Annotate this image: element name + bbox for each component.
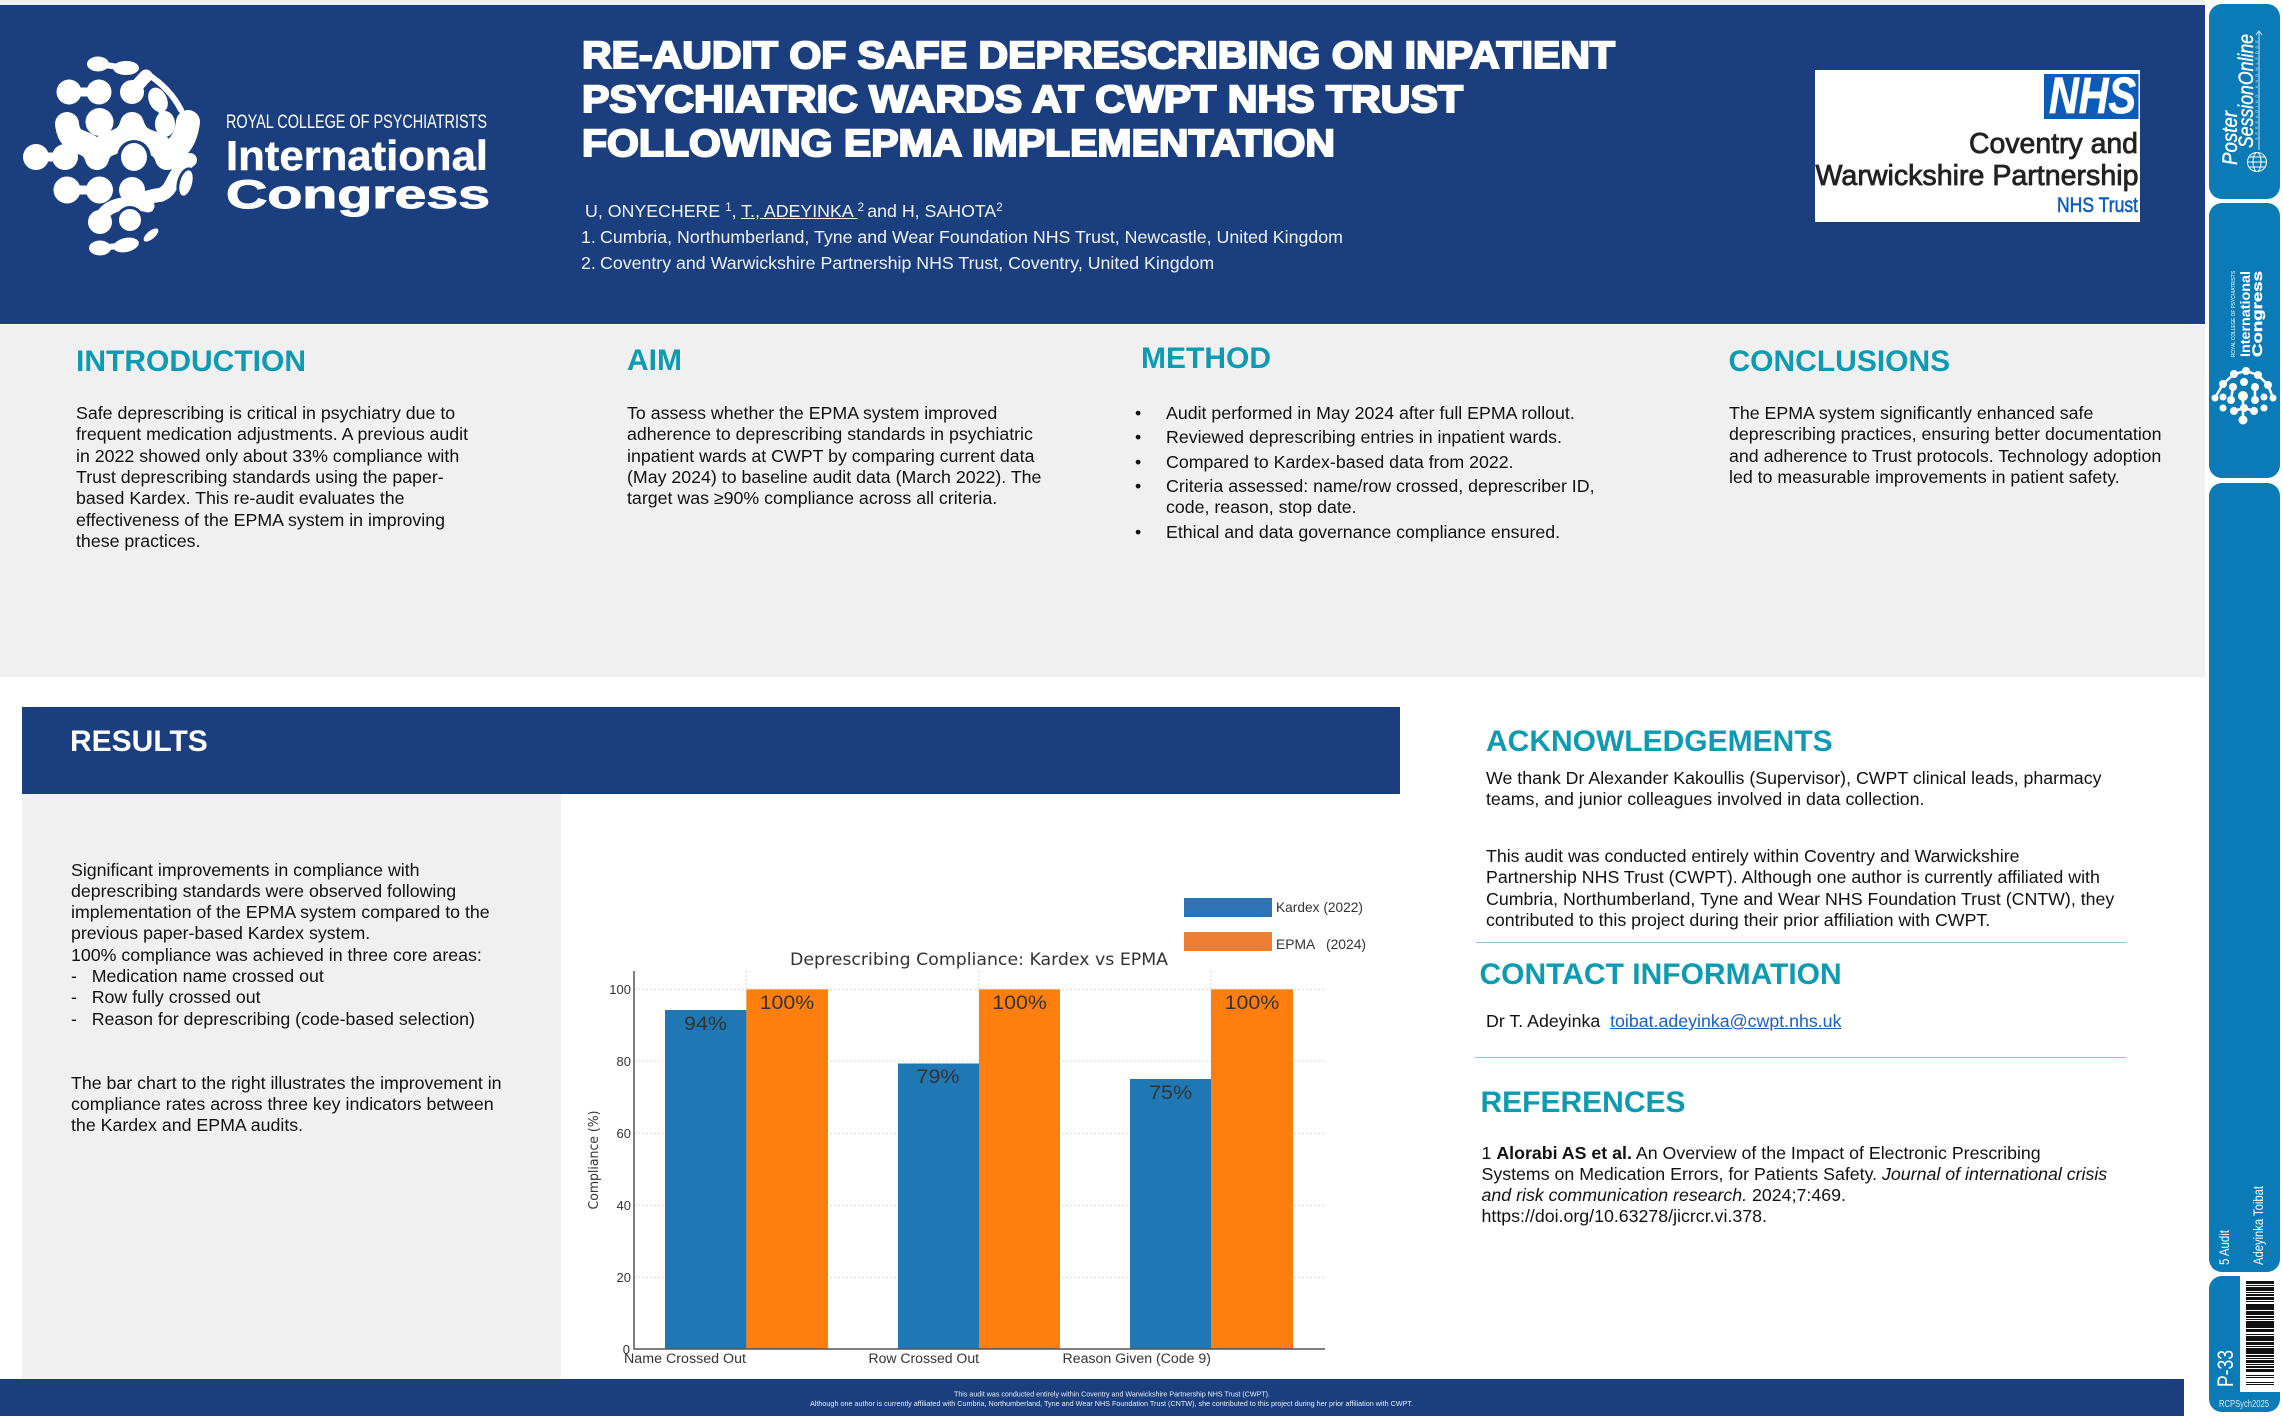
chart title: Deprescribing Compliance: Kardex vs EPMA xyxy=(790,950,1168,970)
affiliation 2: 2. xyxy=(581,253,596,273)
icon: mini brain logo xyxy=(2212,367,2276,424)
sidebar panel: poster number and barcode: P-33 xyxy=(2213,1350,2238,1387)
list: method: Audit performed in May 2024 after full EPMA rollout. xyxy=(1166,403,1575,423)
light strip above header xyxy=(0,0,2205,5)
authors: U, ONYECHERE 1, T., ADEYINKA 2 and H, SAHOTA2 xyxy=(585,201,1003,221)
logo wordmark: Congress xyxy=(226,173,490,217)
footer note: This audit was conducted entirely within Coventry and Warwickshire Partnership NHS Trust (CWPT). xyxy=(954,1390,1270,1398)
sidebar panel: poster number and barcode: RCPSych2025 xyxy=(2219,1399,2269,1410)
text: aim: target was ≥90% compliance across all criteria. xyxy=(627,488,997,508)
heading: contact information: CONTACT INFORMATION xyxy=(1480,958,1842,990)
logo: NHS Coventry and Warwickshire Partnership: Coventry and xyxy=(1969,128,2138,160)
sidebar panel: session and author xyxy=(2209,483,2280,1272)
text: conclusions: The EPMA system significantly enhanced safe xyxy=(1729,403,2093,423)
logo wordmark xyxy=(226,112,490,217)
data labels: 100% xyxy=(1225,993,1279,1014)
affiliation 1: Cumbria, Northumberland, Tyne and Wear Foundation NHS Trust, Newcastle, United Kingdom xyxy=(600,227,1343,247)
list: method: • xyxy=(1135,403,1141,423)
heading: references: REFERENCES xyxy=(1480,1086,1686,1119)
icon: brain globe xyxy=(23,56,199,256)
affiliation 2: Coventry and Warwickshire Partnership NHS Trust, Coventry, United Kingdom xyxy=(600,253,1214,273)
affiliation 1: 1. xyxy=(581,227,596,247)
y tick labels xyxy=(609,982,631,1357)
legend: Kardex (2022) xyxy=(1276,899,1363,915)
y tick labels: 60 xyxy=(617,1126,631,1141)
text: introduction: these practices. xyxy=(76,531,200,551)
y tick labels: 80 xyxy=(617,1054,631,1069)
text: introduction xyxy=(76,403,468,551)
heading: conclusions: CONCLUSIONS xyxy=(1728,344,1950,378)
footer note: Although one author is currently affiliated with Cumbria, Northumberland, Tyne and Wear NHS Foundation Trust (CNTW), she contributed to this project during her prior affiliation with CWPT. xyxy=(810,1399,1413,1408)
list: method: • xyxy=(1135,522,1141,542)
heading: acknowledgements: ACKNOWLEDGEMENTS xyxy=(1486,724,1833,758)
list: method: Criteria assessed: name/row crossed, deprescriber ID, xyxy=(1166,476,1595,496)
text: introduction: Safe deprescribing is critical in psychiatry due to xyxy=(76,403,455,423)
list: method: Ethical and data governance compliance ensured. xyxy=(1166,522,1560,542)
sidebar panel: poster session online: SPREADING KNOWLEDGE xyxy=(2254,40,2259,140)
text: contact: Dr T. Adeyinka toibat.adeyinka@cwpt.nhs.uk xyxy=(1486,1011,1841,1031)
text: results summary: - Row fully crossed out xyxy=(71,987,261,1007)
sidebar panel: international congress: Congress xyxy=(2249,271,2265,357)
bars: EPMA 2024 xyxy=(746,989,1293,1349)
text: aim: To assess whether the EPMA system improved xyxy=(627,403,997,423)
sidebar panel: session and author: Adeyinka Toibat xyxy=(2250,1186,2266,1265)
legend: EPMA (2024) xyxy=(1276,936,1366,952)
text: results summary: Significant improvements in compliance with xyxy=(71,860,420,880)
sidebar panel: international congress xyxy=(2209,203,2280,478)
logo: NHS Coventry and Warwickshire Partnership: Warwickshire Partnership xyxy=(1816,160,2138,192)
text: aim xyxy=(627,403,1041,508)
title xyxy=(582,35,1616,165)
text: results summary: previous paper-based Kardex system. xyxy=(71,923,370,943)
data labels: 100% xyxy=(992,993,1047,1014)
sidebar panel: session and author: 5 Audit xyxy=(2216,1230,2232,1265)
panel: results text background xyxy=(22,794,561,1379)
list: method: • xyxy=(1135,476,1141,496)
x category labels: Row Crossed Out xyxy=(868,1351,979,1366)
heading: aim: AIM xyxy=(627,344,682,377)
text: conclusions: deprescribing practices, ensuring better documentation xyxy=(1729,424,2162,444)
gridlines xyxy=(634,971,1325,1349)
text: aim: adherence to deprescribing standards in psychiatric xyxy=(627,424,1033,444)
title: RE-AUDIT OF SAFE DEPRESCRIBING ON INPATIENT xyxy=(582,35,1615,77)
text: aim: (May 2024) to baseline audit data (March 2022). The xyxy=(627,467,1041,487)
text: acknowledgements: teams, and junior colleagues involved in data collection. xyxy=(1486,789,1924,809)
text: references: 1 Alorabi AS et al. An Overview of the Impact of Electronic Prescribing xyxy=(1482,1142,2041,1162)
y tick labels: 40 xyxy=(617,1198,631,1213)
list: method: • xyxy=(1135,427,1141,447)
text: introduction: frequent medication adjustments. A previous audit xyxy=(76,424,468,444)
text: audit affiliation note xyxy=(1486,846,2114,930)
text: chart description: the Kardex and EPMA audits. xyxy=(71,1115,303,1135)
text: references: Systems on Medication Errors, for Patients Safety. Journal of international crisis xyxy=(1482,1164,2107,1184)
text: results summary: - Medication name crossed out xyxy=(71,966,324,986)
sidebar panel: poster session online: SessionOnline xyxy=(2235,34,2258,148)
list: method xyxy=(1135,403,1595,542)
list: method: code, reason, stop date. xyxy=(1166,497,1357,517)
sidebar panel: poster number and barcode xyxy=(2209,1276,2283,1412)
title: PSYCHIATRIC WARDS AT CWPT NHS TRUST xyxy=(582,79,1463,121)
text: references: and risk communication research. 2024;7:469. xyxy=(1482,1185,1846,1205)
text: audit affiliation note: This audit was conducted entirely within Coventry and Warwickshire xyxy=(1486,846,2020,866)
text: introduction: based Kardex. This re-audit evaluates the xyxy=(76,488,405,508)
title: FOLLOWING EPMA IMPLEMENTATION xyxy=(582,123,1335,165)
text: results summary: implementation of the EPMA system compared to the xyxy=(71,902,490,922)
text: results summary: - Reason for deprescribing (code-based selection) xyxy=(71,1009,475,1029)
data labels xyxy=(684,993,1279,1104)
x category labels xyxy=(624,1351,1211,1366)
top section background panel xyxy=(0,325,2205,677)
text: audit affiliation note: contributed to this project during their prior affiliation with CWPT. xyxy=(1486,910,1990,930)
sidebar panel: international congress: ROYAL COLLEGE OF PSYCHIATRISTS xyxy=(2231,271,2237,357)
header band xyxy=(0,5,2205,324)
sidebar panel: poster session online xyxy=(2209,4,2280,199)
logo: Royal College of Psychiatrists International Congress xyxy=(23,56,490,256)
text: audit affiliation note: Partnership NHS Trust (CWPT). Although one author is currently affiliated with xyxy=(1486,867,2100,887)
text: introduction: effectiveness of the EPMA system in improving xyxy=(76,510,445,530)
legend xyxy=(1184,898,1366,952)
heading: introduction: INTRODUCTION xyxy=(76,344,306,378)
text: chart description: The bar chart to the right illustrates the improvement in xyxy=(71,1072,502,1092)
text: results summary: deprescribing standards were observed following xyxy=(71,881,456,901)
text: conclusions: and adherence to Trust protocols. Technology adoption xyxy=(1729,446,2161,466)
list: method: Reviewed deprescribing entries in inpatient wards. xyxy=(1166,427,1562,447)
text: conclusions xyxy=(1729,403,2162,487)
footer note xyxy=(810,1390,1413,1408)
x category labels: Reason Given (Code 9) xyxy=(1062,1351,1211,1366)
barcode xyxy=(2246,1281,2274,1387)
y tick labels: 20 xyxy=(617,1270,631,1285)
bars: Kardex 2022 xyxy=(665,1010,1211,1349)
bar chart: deprescribing compliance xyxy=(587,898,1366,1366)
text: introduction: in 2022 showed only about 33% compliance with xyxy=(76,446,459,466)
footer band xyxy=(0,1379,2184,1416)
axes xyxy=(634,971,1325,1349)
list: method: Compared to Kardex-based data from 2022. xyxy=(1166,452,1514,472)
results header band xyxy=(22,707,1400,794)
text: chart description xyxy=(71,1072,502,1135)
sidebar panel: international congress: International xyxy=(2237,271,2253,357)
text: references: https://doi.org/10.63278/jicrcr.vi.378. xyxy=(1482,1206,1767,1226)
text: introduction: Trust deprescribing standards using the paper- xyxy=(76,467,444,487)
sidebar xyxy=(2209,4,2280,1412)
logo wordmark: International xyxy=(226,132,488,179)
text: results summary xyxy=(71,860,490,1029)
x category labels: Name Crossed Out xyxy=(624,1351,746,1366)
heading: method: METHOD xyxy=(1141,342,1271,374)
sidebar panel: poster session online: Poster xyxy=(2219,110,2242,165)
logo: NHS Coventry and Warwickshire Partnership xyxy=(1815,70,2140,222)
y axis title: Compliance (%) xyxy=(587,1110,602,1210)
y tick labels: 0 xyxy=(623,1342,630,1357)
text: audit affiliation note: Cumbria, Northumberland, Tyne and Wear NHS Foundation Trust (CNTW), they xyxy=(1486,889,2114,909)
text: acknowledgements: We thank Dr Alexander Kakoullis (Supervisor), CWPT clinical leads, pharmacy xyxy=(1486,768,2101,788)
y tick labels: 100 xyxy=(609,982,631,997)
data labels: 94% xyxy=(684,1014,727,1035)
text: aim: inpatient wards at CWPT by comparing current data xyxy=(627,446,1034,466)
data labels: 75% xyxy=(1149,1083,1192,1104)
text: chart description: compliance rates across three key indicators between xyxy=(71,1094,494,1114)
text: conclusions: led to measurable improvements in patient safety. xyxy=(1729,467,2120,487)
text: references xyxy=(1482,1142,2107,1226)
list: method: • xyxy=(1135,452,1141,472)
heading: results: RESULTS xyxy=(70,725,208,758)
text: acknowledgements xyxy=(1486,768,2102,809)
data labels: 100% xyxy=(760,993,814,1014)
data labels: 79% xyxy=(916,1067,960,1088)
text: results summary: 100% compliance was achieved in three core areas: xyxy=(71,945,482,965)
